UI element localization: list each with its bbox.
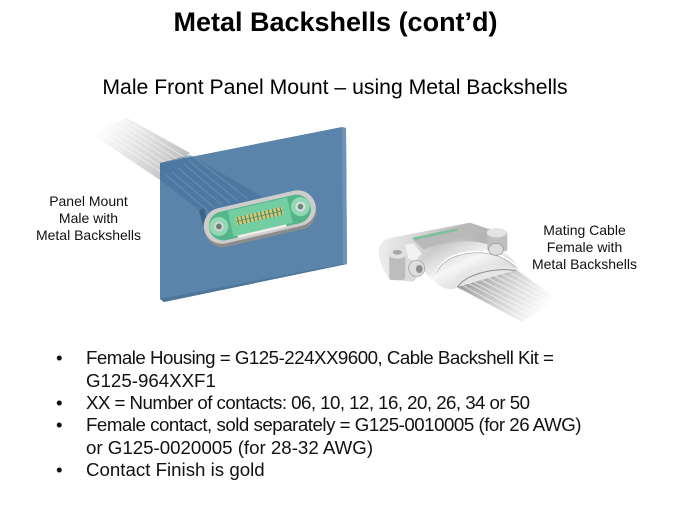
blue panel bbox=[160, 127, 347, 302]
label: panel mount: Male with bbox=[59, 210, 118, 226]
bullet list bbox=[56, 347, 581, 480]
cable behind panel bbox=[90, 118, 190, 180]
title: Metal Backshells (cont’d) bbox=[173, 7, 498, 37]
label: mating cable: Female with bbox=[547, 239, 622, 255]
cable strands bbox=[457, 270, 558, 322]
bullet: female contact bbox=[86, 414, 581, 459]
bullet: female housing bbox=[86, 347, 553, 392]
label: mating cable: Metal Backshells bbox=[532, 256, 637, 272]
label: panel mount: Panel Mount bbox=[49, 193, 128, 209]
label: mating cable bbox=[532, 222, 637, 272]
subtitle: Male Front Panel Mount – using Metal Backshells bbox=[102, 76, 568, 99]
label: mating cable: Mating Cable bbox=[543, 222, 626, 238]
bullet: female contact: or G125-0020005 (for 28-32 AWG) bbox=[86, 436, 373, 458]
bullet: XX contacts: XX = Number of contacts: 06, 10, 12, 16, 20, 26, 34 or 50 bbox=[86, 392, 529, 413]
bullet: female housing: Female Housing = G125-224XX9600, Cable Backshell Kit = bbox=[86, 347, 553, 368]
mating cable connector bbox=[378, 223, 518, 290]
panel connector bbox=[200, 187, 320, 251]
bullet: contact finish: Contact Finish is gold bbox=[86, 459, 265, 480]
bullet: female contact: Female contact, sold separately = G125-0010005 (for 26 AWG) bbox=[86, 414, 581, 435]
bullet: female housing: G125-964XXF1 bbox=[86, 370, 216, 390]
label: panel mount bbox=[36, 193, 141, 243]
label: panel mount: Metal Backshells bbox=[36, 227, 141, 243]
